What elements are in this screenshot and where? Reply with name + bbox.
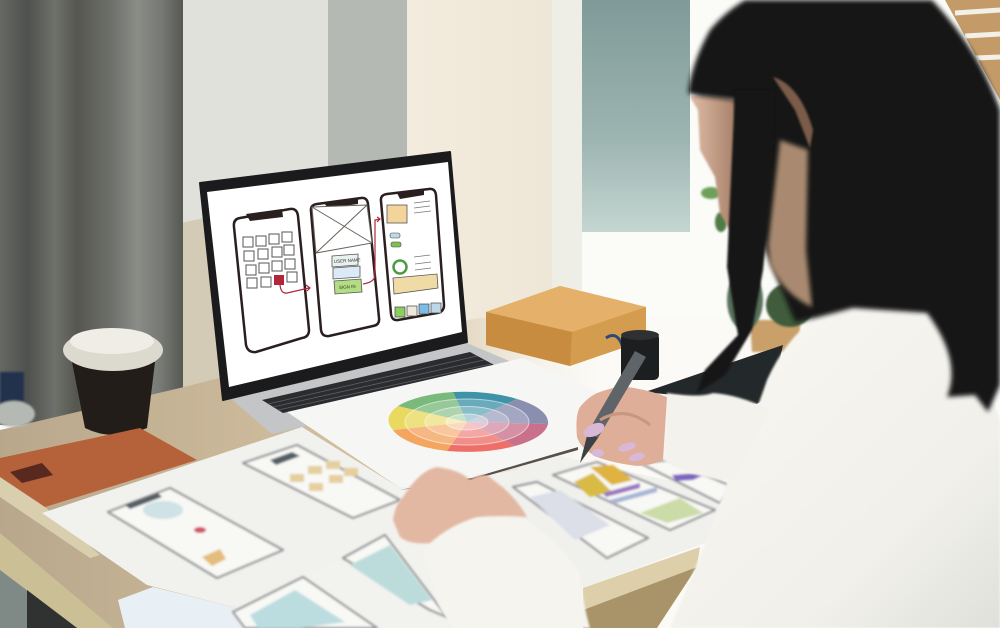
desk front edge left bbox=[0, 533, 113, 628]
orange box bbox=[486, 286, 646, 366]
body bbox=[670, 309, 1000, 628]
laptop screen bbox=[207, 162, 462, 387]
wireframe phones on screen bbox=[234, 189, 444, 352]
keyboard bbox=[262, 352, 498, 413]
floor shadow left bbox=[0, 570, 77, 628]
black tablet at right bbox=[645, 345, 783, 404]
right hand and pen bbox=[576, 351, 667, 466]
phone notches bbox=[246, 189, 424, 221]
phone 2 login form: USER NAME bbox=[334, 257, 361, 264]
phone 3 content bbox=[387, 201, 441, 317]
woman ear bbox=[773, 77, 813, 148]
desk wood behind woman bbox=[750, 320, 800, 352]
woman shirt bbox=[423, 309, 1000, 628]
coffee cup bbox=[63, 328, 163, 435]
phone 1 icon grid bbox=[243, 232, 297, 288]
color wheel sheet bbox=[287, 358, 597, 490]
woman face bbox=[690, 96, 737, 238]
sketch colour details bbox=[125, 452, 710, 628]
left sleeve bbox=[423, 516, 590, 628]
woman cheek and neck bbox=[768, 140, 812, 307]
plant bbox=[701, 187, 814, 330]
paper sheets bbox=[42, 358, 733, 628]
desk edge right bbox=[583, 547, 700, 628]
phone 2 image placeholder bbox=[312, 205, 372, 253]
left hand bbox=[393, 467, 527, 543]
wireframe sketches on paper bbox=[108, 445, 733, 628]
curtain bbox=[0, 0, 183, 425]
red selected icon and arrow bbox=[274, 275, 310, 293]
phone 2 login form bbox=[332, 254, 362, 294]
laptop bbox=[200, 152, 535, 434]
hair strand over face bbox=[697, 90, 775, 393]
red arrow to phone 3 bbox=[363, 217, 380, 284]
color wheel bbox=[388, 392, 548, 452]
phone 2 login form: SIGN IN bbox=[339, 284, 356, 290]
right sleeve bbox=[663, 393, 770, 480]
black mug bbox=[606, 330, 659, 380]
orange notebook bbox=[0, 428, 197, 558]
pens and clear case bbox=[0, 372, 35, 427]
woman hair bbox=[688, 0, 1000, 412]
desk bbox=[0, 318, 800, 628]
